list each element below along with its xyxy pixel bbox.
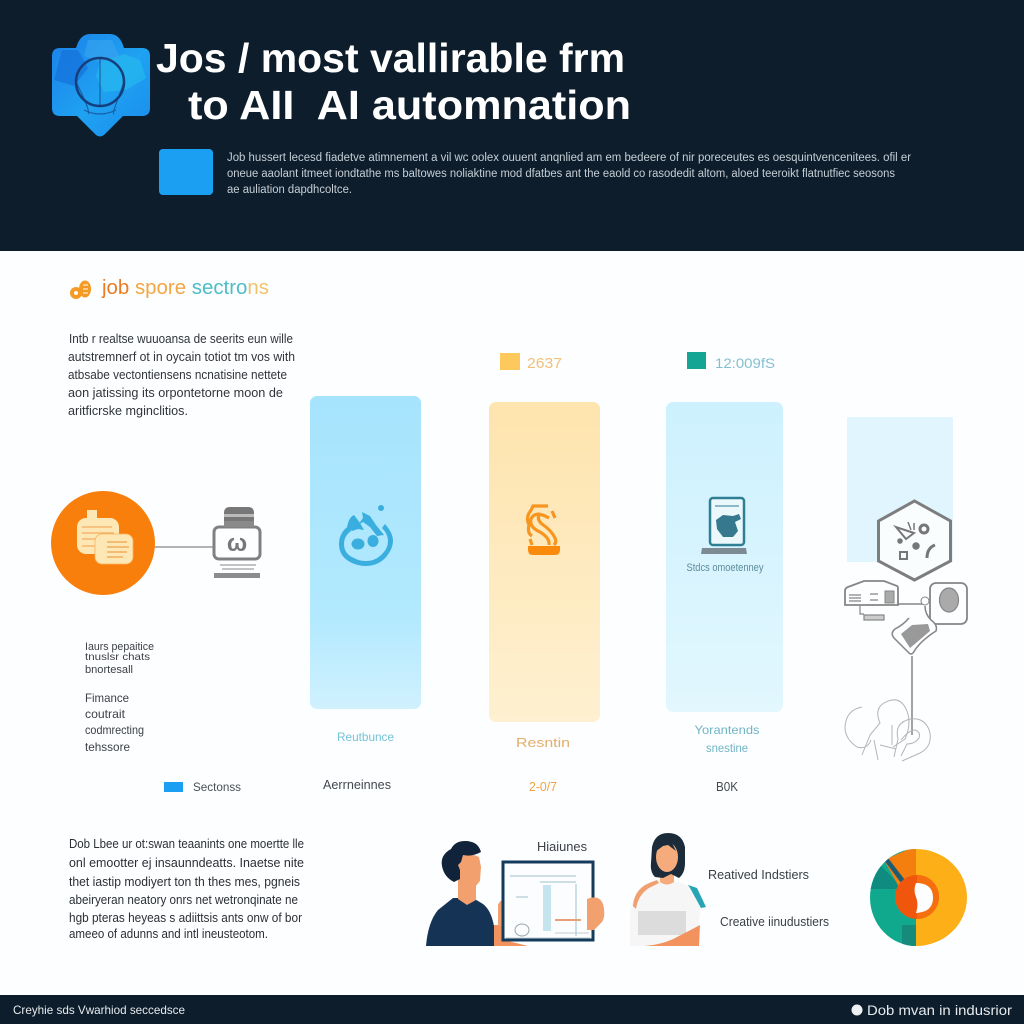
icon: automation device: ω [227, 530, 247, 557]
small job list [85, 641, 154, 754]
icon: blue square [159, 149, 213, 195]
icon: orange links [70, 280, 91, 299]
intro paragraph: autstremnerf ot in oycain totiot tm vos with [68, 350, 295, 364]
intro text: Job hussert lecesd fiadetve atimnement a vil wc oolex ouuent anqnlied am em bedeere of nir poreceutes es oesquintvencenitees. ofil er [227, 152, 911, 164]
heading text: job spore sectrons [101, 277, 269, 299]
bar caption: Stdcs omoetenney [686, 562, 764, 574]
bottom paragraph: hgb pteras heyeas s adiittsis ants onw of bor [69, 911, 302, 925]
caption: Reativd Indstiers: Reatived Indstiers [708, 867, 809, 882]
icon: sketched people [845, 700, 930, 761]
intro text: ae auliation dapdhcoltce. [227, 184, 352, 196]
small job list: tnuslsr chats [85, 651, 150, 663]
small job list: bnortesall [85, 664, 133, 676]
donut chart [870, 849, 967, 946]
bar 3 [666, 402, 783, 712]
footer bar [0, 995, 1024, 1024]
footer note: Creyhie sds Vwarhiod seccedsce [13, 1003, 185, 1017]
bottom paragraph: abeiryeran neatory onrs net wetronqinate ne [69, 893, 298, 907]
bar 1 [310, 396, 421, 709]
bottom paragraph: ameeo of adunns and intl ineusteotom. [69, 927, 268, 941]
value: 2-0/7: 2-0/7 [529, 779, 557, 794]
legend: sections: Sectonss [193, 780, 241, 794]
bar label: Resntin: Resntin [516, 736, 570, 750]
title: to AII AI automnation [188, 82, 631, 128]
small job list: Iaurs pepaitice [85, 641, 154, 653]
bar 2 [489, 402, 600, 722]
value: Aerrneinnes: Aerrneinnes [323, 778, 391, 792]
legend: sections [164, 780, 241, 794]
header panel [0, 0, 1024, 251]
connector line [150, 546, 214, 548]
legend: yellow: 2637 [527, 355, 562, 372]
legend: teal: 12:009fS [715, 355, 775, 371]
icon: automation device [214, 507, 260, 578]
bar label: Yorantends: snestine [706, 741, 748, 755]
illustration: person with tablet [426, 841, 604, 946]
title [156, 35, 631, 128]
title: Jos / most vallirable frm [156, 35, 625, 81]
icon: blue AI head logo [52, 34, 150, 136]
intro text [227, 152, 911, 196]
icon: machine flow diagram [845, 581, 967, 735]
bar label: Yorantends: Yorantends [694, 723, 760, 737]
icon: blue globe [339, 505, 393, 566]
bottom paragraph: onl emootter ej insaunndeatts. Inaetse nite [69, 856, 304, 870]
caption: Hiaiunes: Hiaiunes [537, 840, 587, 854]
small job list: Fimance [85, 691, 129, 705]
section heading [70, 277, 269, 299]
bottom paragraph: Dob Lbee ur ot:swan teaanints one moertte lle [69, 837, 304, 851]
small job list: codmrecting [85, 723, 144, 737]
bar 4 [847, 417, 953, 562]
bottom paragraph: thet iastip modiyert ton th thes mes, pgneis [69, 875, 300, 889]
intro text: oneue aaolant itmeet iondtathe ms baltowes noliaktine mod dfatbes ant the eaold co rasodedit altom, aloed teeroikt flatnutfiec seosons [227, 168, 895, 180]
intro paragraph: aon jatissing its orpontetorne moon de [68, 386, 283, 400]
bottom paragraph [69, 837, 304, 941]
icon: orange circle with documents [51, 491, 155, 595]
illustration: woman [630, 833, 706, 946]
icon: orange dollar scroll [528, 506, 560, 555]
small job list: coutrait [85, 707, 126, 721]
footer source: Dob mvan in indusrior [867, 1003, 1013, 1018]
legend: teal [687, 352, 775, 371]
bar label: Reutbunce: Reutbunce [337, 730, 394, 744]
icon: tablet on stand [701, 498, 747, 554]
intro paragraph: Intb r realtse wuuoansa de seerits eun wille [69, 332, 293, 346]
intro paragraph [68, 332, 295, 418]
bar label: Yorantends [694, 723, 760, 755]
legend: yellow [500, 353, 562, 372]
tablet screen [503, 862, 593, 940]
caption: Creative industries: Creative iinudustiers [720, 914, 829, 929]
icon: hexagon network [878, 501, 950, 580]
intro paragraph: atbsabe vectontiensens ncnatisine nettete [68, 368, 287, 382]
small job list: tehssore [85, 740, 130, 754]
intro paragraph: aritficrske mginclitios. [68, 404, 188, 418]
value: B0K: B0K [716, 779, 738, 794]
